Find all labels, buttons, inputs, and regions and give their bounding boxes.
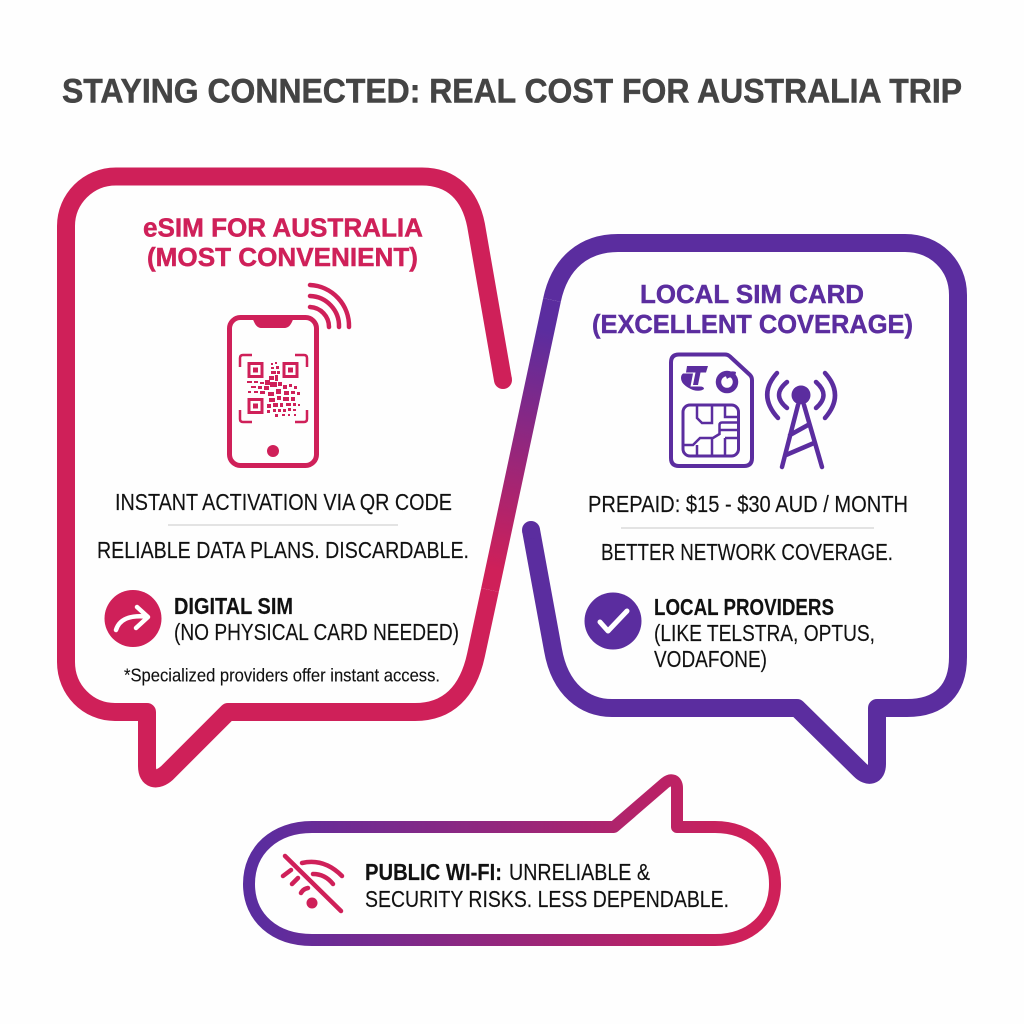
gradient speech bubble outline <box>249 780 775 940</box>
text: public Wi-Fi warning: SECURITY RISKS. LESS DEPENDABLE. <box>365 886 729 912</box>
text: public Wi-Fi warning: PUBLIC WI-FI: <box>365 859 502 885</box>
icon: cell tower <box>767 373 835 467</box>
connector: gradient diagonal between bubbles <box>490 300 552 590</box>
text: digital SIM: DIGITAL SIM <box>174 593 293 619</box>
text: local providers: LOCAL PROVIDERS <box>654 594 834 620</box>
text: digital SIM: (NO PHYSICAL CARD NEEDED) <box>174 619 459 645</box>
panel: eSIM for Australia <box>66 176 512 778</box>
text: instant activation: INSTANT ACTIVATION VIA QR CODE <box>115 489 452 515</box>
icon: SIM card <box>671 354 752 466</box>
text: local providers: (LIKE TELSTRA, OPTUS, <box>654 620 875 646</box>
text: digital SIM <box>174 593 459 645</box>
text: local providers: VODAFONE) <box>654 646 767 672</box>
icon: arrow badge <box>104 590 162 647</box>
panel: public Wi-Fi <box>249 780 775 940</box>
title: STAYING CONNECTED: REAL COST FOR AUSTRALIA TRIP <box>62 72 962 110</box>
heading: local SIM <box>592 281 913 339</box>
heading: eSIM: eSIM FOR AUSTRALIA <box>143 214 423 242</box>
icon: check badge <box>584 592 642 650</box>
text: local providers <box>654 594 875 672</box>
heading: local SIM: (EXCELLENT COVERAGE) <box>592 311 913 339</box>
text: public Wi-Fi warning: UNRELIABLE & <box>509 859 650 885</box>
pink bubble rounded end <box>494 371 512 389</box>
pink speech bubble outline <box>66 176 503 778</box>
icon: Wi-Fi off <box>283 856 342 911</box>
text: reliable data plans: RELIABLE DATA PLANS. DISCARDABLE. <box>97 537 469 563</box>
icon: phone with QR code and signal <box>230 285 349 466</box>
heading: eSIM: (MOST CONVENIENT) <box>147 244 418 272</box>
text: public Wi-Fi warning <box>365 859 729 912</box>
purple speech bubble outline <box>531 243 958 775</box>
text: better coverage: BETTER NETWORK COVERAGE. <box>601 539 893 565</box>
heading: local SIM: LOCAL SIM CARD <box>640 281 864 309</box>
heading: eSIM <box>143 214 423 272</box>
purple bubble rounded end <box>522 521 540 539</box>
text: footnote: *Specialized providers offer instant access. <box>124 666 440 686</box>
text: prepaid price: PREPAID: $15 - $30 AUD / MONTH <box>588 491 908 517</box>
panel: local SIM card <box>522 243 958 775</box>
